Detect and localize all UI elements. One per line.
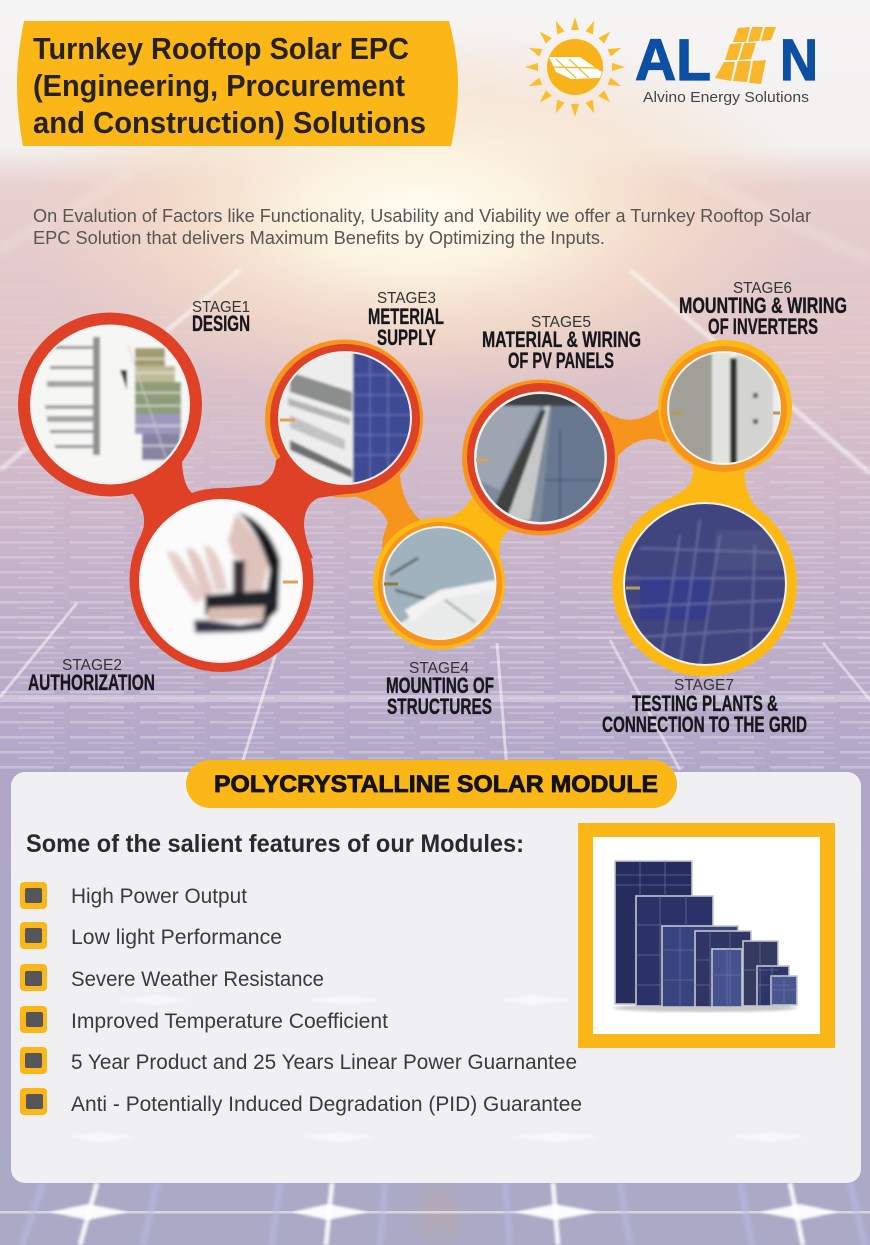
heading pill <box>186 760 677 808</box>
heading pill: POLYCRYSTALLINE SOLAR MODULE <box>214 771 658 798</box>
label: stage 7 <box>602 677 807 737</box>
feature: low light performance <box>20 922 282 949</box>
connector: stage 1 to 2 <box>110 404 221 580</box>
intro text: EPC Solution that delivers Maximum Benefits by Optimizing the Inputs. <box>33 228 605 248</box>
stage 3 circle: material supply <box>270 344 420 494</box>
label: stage 6: STAGE6 <box>733 280 792 297</box>
stage 7 circle: testing plants and connection to the grid <box>612 492 797 676</box>
label: stage 1: STAGE1 <box>192 299 250 316</box>
label: stage 1 <box>192 299 250 336</box>
title banner <box>17 21 458 146</box>
wordmark <box>635 27 818 93</box>
feature: severe weather resistance <box>20 964 324 991</box>
label: stage 4: MOUNTING OF <box>386 673 494 698</box>
connector: stage 4 to 5 <box>439 457 540 583</box>
label: stage 2: STAGE2 <box>62 657 122 674</box>
intro text <box>33 206 811 248</box>
connector: stage 2 to 3 <box>205 418 345 580</box>
logo: Alvino Energy Solutions: Alvino Energy Solutions <box>643 89 809 106</box>
wordmark: AL <box>635 28 711 93</box>
stage 4 circle: mounting of structures <box>373 518 505 650</box>
intro text: On Evalution of Factors like Functionality, Usability and Viability we offer a Turnkey Rooftop Solar <box>33 206 811 226</box>
label: stage 1: DESIGN <box>192 311 250 336</box>
stage 6 circle: mounting and wiring of inverters <box>658 340 792 474</box>
feature: temperature coefficient: Improved Temperature Coefficient <box>71 1010 388 1033</box>
label: stage 3: SUPPLY <box>377 325 436 350</box>
icon: solar cell letter <box>715 27 776 84</box>
feature: severe weather resistance: Severe Weather Resistance <box>71 968 324 991</box>
stage 5 circle: material and wiring of PV panels <box>462 380 618 536</box>
panel: polycrystalline solar module <box>11 760 861 1183</box>
feature: high power output: High Power Output <box>71 885 247 908</box>
logo: Alvino Energy Solutions <box>525 17 818 117</box>
label: stage 5 <box>482 314 641 373</box>
process chain of seven stages <box>18 280 847 737</box>
label: stage 3: STAGE3 <box>377 290 436 307</box>
label: stage 2 <box>28 657 155 695</box>
icon: sun with solar panel <box>525 17 625 117</box>
label: stage 4: STRUCTURES <box>387 694 492 719</box>
label: stage 4: STAGE4 <box>409 660 469 677</box>
label: stage 4 <box>386 660 494 719</box>
feature: low light performance: Low light Performance <box>71 926 282 949</box>
title banner: and Construction) Solutions <box>33 105 426 140</box>
label: stage 2: AUTHORIZATION <box>28 670 155 695</box>
wordmark: N <box>780 28 818 93</box>
stage 3 outer orange ring <box>265 340 423 498</box>
feature: high power output <box>20 882 247 909</box>
label: stage 6 <box>679 280 847 339</box>
connector: stage 3 to 4 <box>344 418 439 583</box>
connector: stage 6 to 7 <box>672 407 757 584</box>
title banner: Turnkey Rooftop Solar EPC <box>33 31 409 66</box>
label: stage 3 <box>368 290 444 350</box>
label: stage 7: TESTING PLANTS & <box>632 691 778 716</box>
label: stage 5: OF PV PANELS <box>508 348 614 373</box>
stage 1 circle: design <box>18 312 202 496</box>
module photo in yellow frame <box>578 823 835 1048</box>
features heading: Some of the salient features of our Modules: <box>26 830 524 858</box>
label: stage 6: OF INVERTERS <box>708 314 818 339</box>
label: stage 5: MATERIAL & WIRING <box>482 327 641 352</box>
connector: stage 5 to 6 <box>540 407 725 457</box>
stage 2 circle: authorization <box>130 488 314 672</box>
label: stage 3: METERIAL <box>368 304 444 329</box>
label: stage 7: STAGE7 <box>674 677 734 694</box>
title banner: (Engineering, Procurement <box>33 68 405 103</box>
feature: product and power guarantee: 5 Year Product and 25 Years Linear Power Guarnantee <box>71 1051 577 1074</box>
modules illustration <box>613 861 797 1012</box>
feature list <box>20 882 582 1116</box>
label: stage 5: STAGE5 <box>531 314 591 331</box>
feature: PID guarantee: Anti - Potentially Induced Degradation (PID) Guarantee <box>71 1093 582 1116</box>
